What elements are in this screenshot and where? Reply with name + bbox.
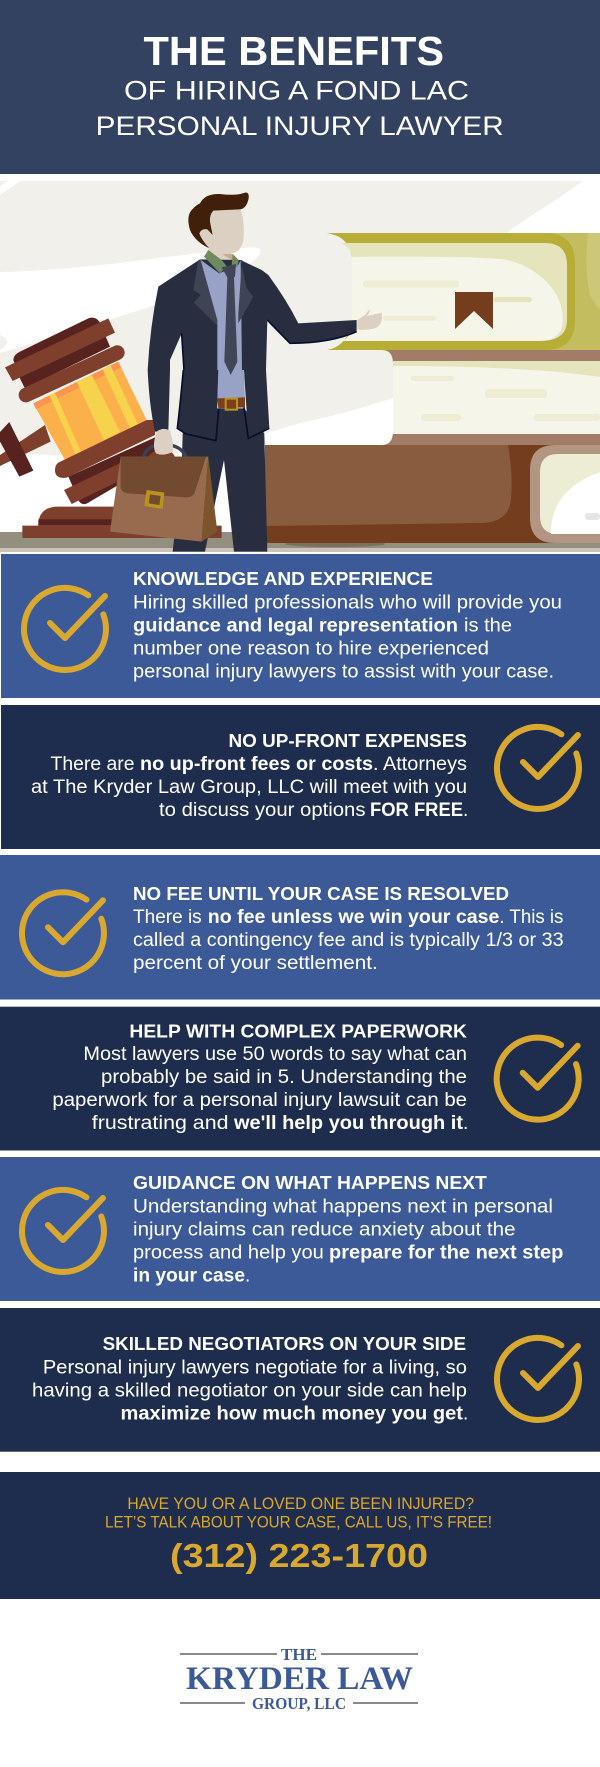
logo: The Kryder Law Group: KRYDER LAW — [186, 1661, 413, 1697]
briefcase — [110, 429, 217, 542]
text block: no up-front fees or costs — [140, 754, 373, 775]
illustration: lawyer with gavel and law books — [0, 181, 600, 552]
text block: guidance and legal representation — [133, 615, 458, 636]
panel: knowledge and experience — [1, 554, 600, 698]
text block: percent of your settlement. — [133, 953, 378, 974]
text block: . — [463, 1113, 468, 1134]
text block: prepare for the next step — [329, 1242, 563, 1263]
pointing hand — [357, 309, 382, 330]
icon: check circle — [22, 892, 104, 974]
text block: . This is — [499, 907, 563, 928]
face — [199, 209, 244, 277]
head and torso — [148, 193, 382, 375]
text block: There are — [50, 754, 134, 775]
title: OF HIRING A FOND LAC — [124, 76, 469, 106]
panel: skilled negotiators on your side — [0, 1308, 600, 1452]
panel: no fee until your case is resolved — [0, 855, 600, 1000]
shirt — [200, 259, 242, 370]
heading: NO UP-FRONT EXPENSES — [228, 730, 467, 751]
logo: The Kryder Law Group: THE — [281, 1645, 317, 1664]
icon: check circle — [24, 588, 106, 670]
text block: injury claims can reduce anxiety about the — [133, 1219, 516, 1240]
text block: . — [245, 1265, 250, 1286]
icon: bookmark — [455, 292, 493, 329]
gavel base — [22, 507, 222, 538]
header panel — [0, 0, 600, 174]
icon: check circle — [497, 1038, 579, 1120]
trousers — [173, 408, 267, 552]
icon: check circle — [497, 727, 579, 809]
text block: Hiring skilled professionals who will provide you — [133, 592, 562, 613]
call to action text: HAVE YOU OR A LOVED ONE BEEN INJURED? — [127, 1494, 474, 1513]
green book — [327, 233, 600, 350]
heading: KNOWLEDGE AND EXPERIENCE — [133, 568, 433, 589]
phone number: (312) 223-1700 — [170, 1537, 428, 1574]
cream book — [382, 350, 600, 445]
logo: The Kryder Law Group — [180, 1645, 418, 1713]
text block: Understanding what happens next in personal — [133, 1196, 553, 1217]
call to action text: LET’S TALK ABOUT YOUR CASE, CALL US, IT’S FREE! — [105, 1513, 492, 1532]
ground — [0, 532, 600, 552]
text block: Most lawyers use 50 words to say what can — [83, 1044, 467, 1065]
text block: having a skilled negotiator on your side can help — [32, 1380, 467, 1401]
text block: paperwork for a personal injury lawsuit can be — [52, 1090, 467, 1111]
text block: There is — [133, 907, 202, 928]
text block: no fee unless we win your case — [208, 907, 499, 928]
text block: process and help you — [133, 1242, 324, 1263]
text block: probably be said in 5. Understanding the — [101, 1067, 467, 1088]
lower jacket and belt — [148, 362, 269, 441]
panel: call to action — [0, 1472, 600, 1599]
text block: in your case — [133, 1265, 245, 1286]
briefcase clasp — [144, 490, 164, 509]
panel: no up-front expenses — [1, 705, 600, 849]
text block: Personal injury lawyers negotiate for a living, so — [43, 1357, 467, 1378]
tie — [222, 264, 237, 375]
text block: at The Kryder Law Group, LLC will meet with you — [31, 777, 467, 798]
lapels — [193, 260, 253, 326]
panel: help with complex paperwork — [0, 1007, 600, 1150]
heading: NO FEE UNTIL YOUR CASE IS RESOLVED — [133, 883, 509, 904]
hair — [188, 193, 249, 248]
tan book — [530, 445, 600, 543]
text block: is the — [464, 615, 512, 636]
gavel handle — [0, 425, 51, 466]
panel: guidance on what happens next — [0, 1157, 600, 1301]
text block: number one reason to hire experienced — [133, 638, 489, 659]
hand on handle — [154, 429, 173, 455]
text block: frustrating and — [92, 1113, 228, 1134]
text block: personal injury lawyers to assist with your case. — [133, 661, 554, 682]
gavel head — [5, 318, 167, 504]
heading: HELP WITH COMPLEX PAPERWORK — [129, 1020, 468, 1041]
jacket with arm — [148, 259, 357, 370]
text block: to discuss your options — [159, 800, 366, 821]
text block: maximize how much money you get — [120, 1403, 464, 1424]
icon: check circle — [497, 1338, 579, 1420]
text block: called a contingency fee and is typically 1/3 or 33 — [133, 930, 564, 951]
text block: we'll help you through it — [233, 1113, 464, 1134]
title: THE BENEFITS — [144, 28, 444, 74]
heading: GUIDANCE ON WHAT HAPPENS NEXT — [133, 1172, 488, 1193]
heading: SKILLED NEGOTIATORS ON YOUR SIDE — [103, 1333, 466, 1354]
collar — [204, 250, 239, 273]
icon: check circle — [22, 1190, 104, 1272]
text block: FOR FREE — [370, 800, 463, 821]
logo: The Kryder Law Group: GROUP, LLC — [252, 1694, 346, 1713]
text block: . Attorneys — [373, 754, 467, 775]
lawyer figure — [148, 193, 382, 552]
title: PERSONAL INJURY LAWYER — [96, 111, 504, 141]
gavel — [0, 318, 222, 538]
brown book — [265, 445, 565, 543]
text block: . — [463, 1403, 468, 1424]
text block: . — [463, 800, 468, 821]
